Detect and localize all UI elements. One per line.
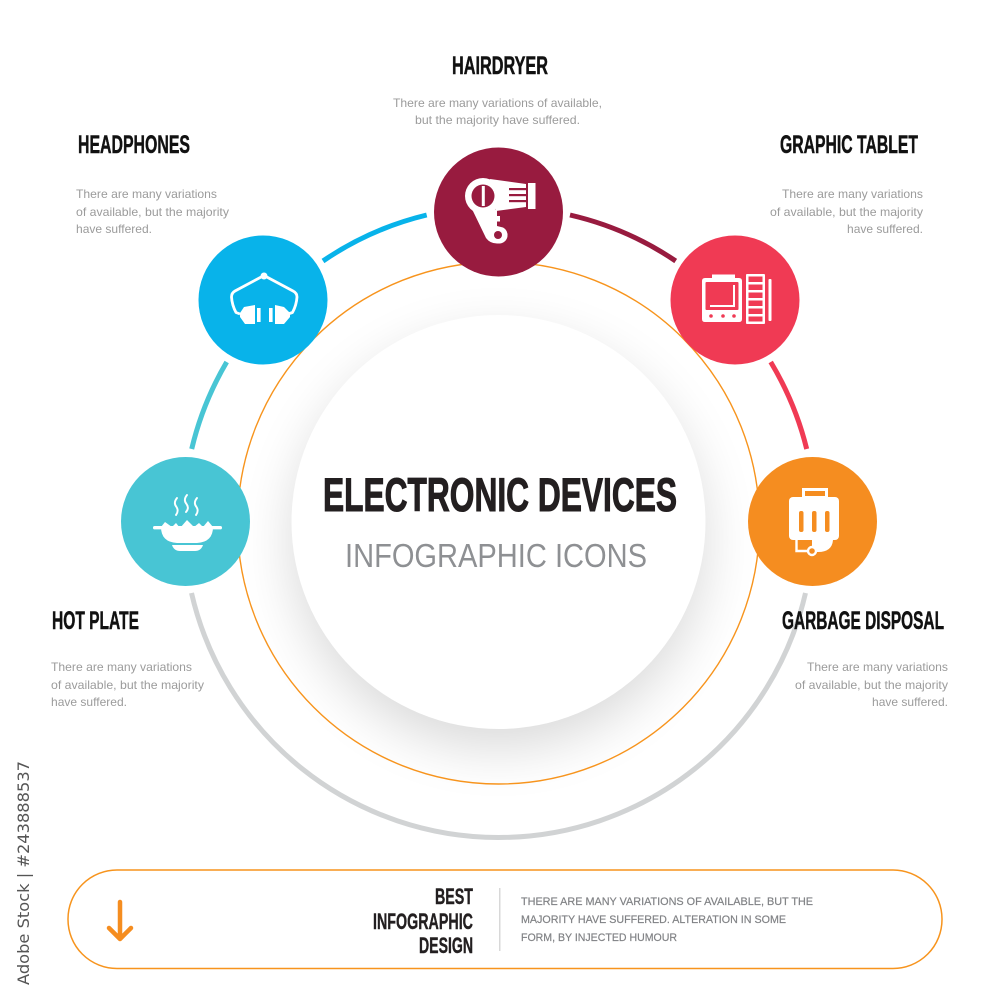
- text: garbage disposal description: of available, but the majority: [795, 678, 948, 692]
- heading: hot plate: HOT PLATE: [52, 607, 139, 635]
- banner text: FORM, BY INJECTED HUMOUR: [521, 932, 677, 944]
- central disc with soft shadow: [292, 315, 706, 748]
- text: hot plate description: There are many variations: [51, 660, 192, 674]
- text: hot plate description: of available, but the majority: [51, 678, 204, 692]
- red arc segment: [771, 362, 807, 449]
- icon: headphones: [232, 272, 297, 324]
- node: headphones: [198, 236, 328, 364]
- text: headphones description: There are many variations: [76, 187, 217, 201]
- node: garbage disposal: [748, 457, 877, 586]
- title: ELECTRONIC DEVICES: [323, 468, 677, 521]
- footer banner: [68, 870, 942, 968]
- icon: hairdryer: [465, 178, 536, 244]
- heading: hairdryer: HAIRDRYER: [452, 52, 548, 80]
- banner heading: INFOGRAPHIC: [373, 909, 473, 934]
- text: headphones description: have suffered.: [76, 222, 152, 236]
- maroon arc segment: [570, 215, 676, 261]
- icon: down arrow: [109, 902, 131, 939]
- banner heading: DESIGN: [419, 933, 473, 958]
- text: graphic tablet description: There are many variations: [782, 187, 923, 201]
- heading: graphic tablet: GRAPHIC TABLET: [780, 131, 918, 159]
- blue arc segment: [323, 215, 427, 261]
- banner text: THERE ARE MANY VARIATIONS OF AVAILABLE, BUT THE: [521, 896, 813, 908]
- node: hot plate: [121, 457, 250, 586]
- icon: hot plate: [153, 495, 222, 551]
- text: garbage disposal description: have suffered.: [872, 695, 948, 709]
- node: graphic tablet: [670, 236, 800, 364]
- banner text: MAJORITY HAVE SUFFERED. ALTERATION IN SOME: [521, 914, 786, 926]
- teal arc segment: [192, 362, 227, 449]
- text: graphic tablet description: of available, but the majority: [770, 205, 923, 219]
- text: hairdryer description: but the majority have suffered.: [415, 113, 580, 127]
- text: headphones description: of available, but the majority: [76, 205, 229, 219]
- icon: graphic tablet: [702, 274, 772, 324]
- text: hairdryer description: There are many variations of available,: [393, 96, 602, 110]
- node: hairdryer: [434, 148, 563, 276]
- gray lower arc: [192, 593, 806, 837]
- icon: garbage disposal: [789, 490, 839, 555]
- banner divider: [499, 888, 500, 951]
- text: graphic tablet description: have suffered.: [847, 222, 923, 236]
- side credit text: Adobe Stock | #243888537: [14, 761, 33, 985]
- text: hot plate description: have suffered.: [51, 695, 127, 709]
- subtitle: INFOGRAPHIC ICONS: [345, 537, 647, 574]
- text: garbage disposal description: There are many variations: [807, 660, 948, 674]
- thin orange inner ring: [238, 262, 760, 784]
- heading: headphones: HEADPHONES: [78, 131, 190, 159]
- banner heading: BEST: [435, 884, 473, 909]
